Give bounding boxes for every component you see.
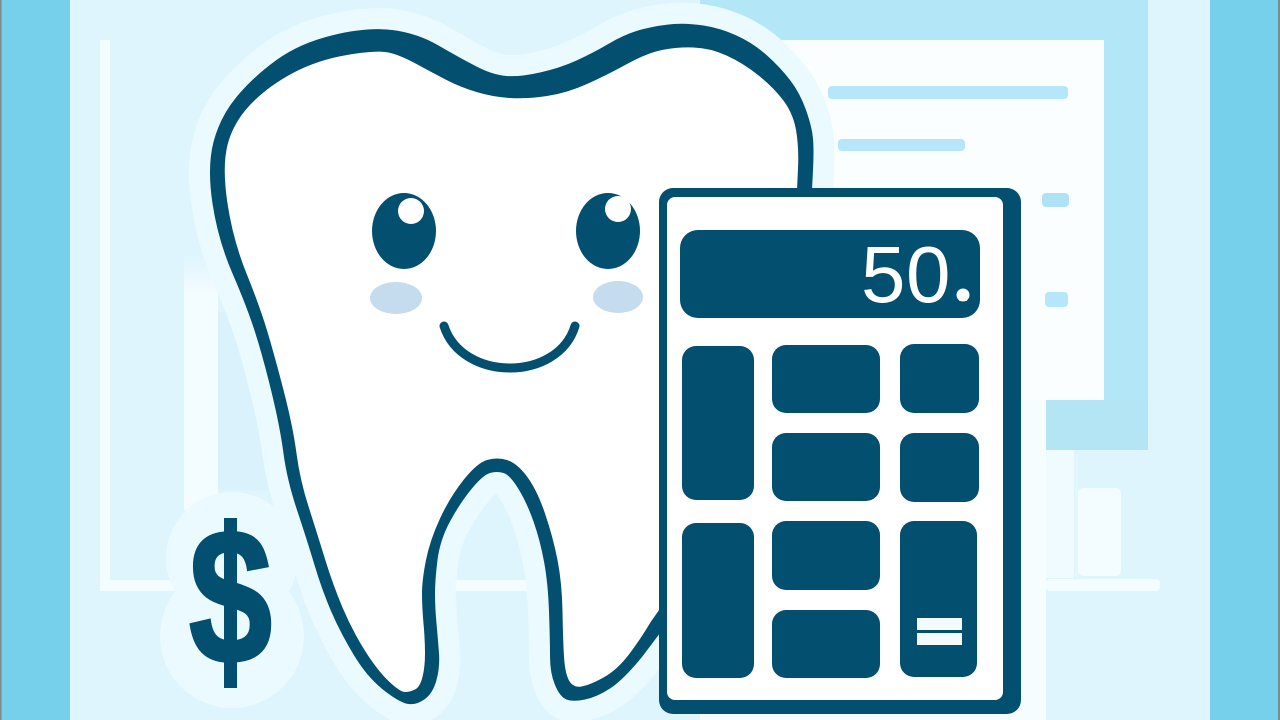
- calculator: [659, 188, 1021, 714]
- calculator keys: [682, 344, 979, 678]
- tooth outline: [210, 24, 813, 704]
- left eye: [372, 193, 436, 269]
- right cheek: [593, 281, 643, 313]
- document backdrop: right: [700, 0, 1160, 720]
- smile: [444, 326, 575, 368]
- calculator display: .: [952, 229, 974, 318]
- document backdrop: left: [100, 40, 550, 591]
- tooth body: [225, 47, 798, 692]
- dollar sign icon: $: [189, 490, 272, 704]
- right eye: [576, 193, 640, 269]
- left cheek: [370, 282, 422, 314]
- calculator display: [680, 229, 980, 319]
- equals sign: [917, 618, 962, 645]
- tooth character: [210, 24, 813, 704]
- calculator body: [659, 188, 1021, 714]
- calculator display: 5: [861, 230, 906, 319]
- dollar halo: [160, 492, 304, 708]
- tooth halo: [210, 24, 813, 704]
- calculator display: 0: [906, 230, 950, 319]
